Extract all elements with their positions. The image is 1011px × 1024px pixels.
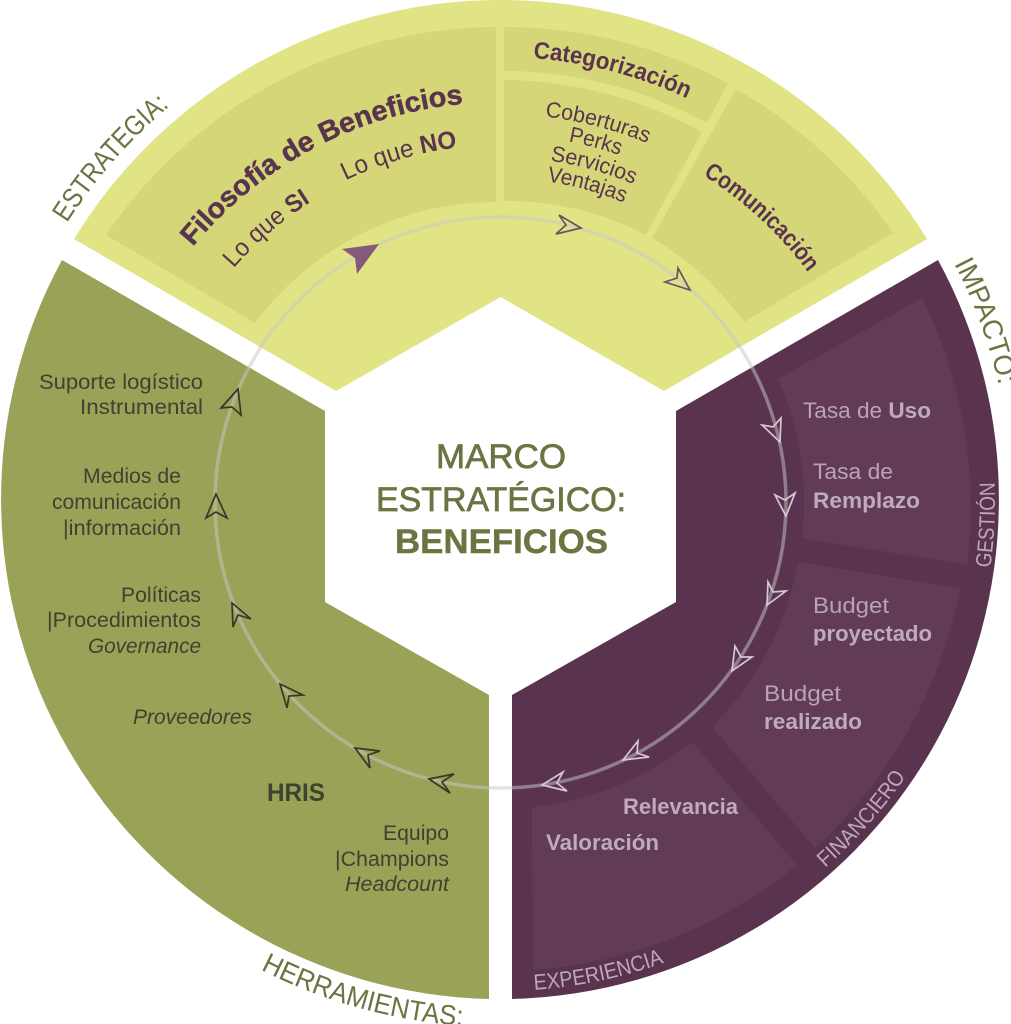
arrows on green panel bbox=[206, 389, 454, 793]
sub-panel: experiencia bbox=[532, 742, 797, 970]
text: budget proyectado bbox=[813, 593, 932, 646]
panel: estrategia bbox=[74, 0, 927, 391]
text: medios de comunicación: |información bbox=[63, 516, 181, 540]
text: políticas bbox=[47, 583, 201, 658]
text: lo que no: Lo que NO bbox=[340, 132, 456, 180]
text: filosofía de beneficios: Filosofía de Beneficios bbox=[179, 88, 462, 246]
text: tasa de remplazo: Tasa de bbox=[813, 459, 893, 484]
arrows on yellow panel bbox=[556, 215, 690, 290]
text: categorización: Categorización bbox=[534, 42, 690, 98]
text: políticas: |Procedimientos bbox=[47, 608, 201, 632]
arrows on purple panel bbox=[542, 418, 795, 791]
text: coberturas list: Ventajas bbox=[550, 166, 626, 202]
text: comunicación: Comunicación bbox=[706, 164, 816, 272]
text: valoración: Valoración bbox=[546, 830, 659, 855]
text: medios de comunicación: comunicación bbox=[52, 490, 181, 514]
title: BENEFICIOS bbox=[395, 523, 608, 561]
sub-panel: financiero bbox=[712, 562, 960, 848]
text: coberturas list bbox=[547, 102, 650, 202]
text: suporte logístico: Instrumental bbox=[80, 395, 203, 419]
text: budget realizado: Budget bbox=[764, 681, 842, 706]
text: tasa de uso: Tasa de Uso bbox=[803, 398, 931, 423]
text: relevancia: Relevancia bbox=[623, 794, 738, 819]
icon: filled start arrow bbox=[342, 244, 379, 274]
cycle ring bbox=[215, 217, 786, 788]
text: equipo: Headcount bbox=[345, 872, 450, 896]
sub-panel: coberturas bbox=[504, 80, 702, 235]
text: políticas: Governance bbox=[88, 634, 201, 658]
text: coberturas list: Coberturas bbox=[547, 102, 650, 142]
text: budget realizado: realizado bbox=[764, 709, 862, 734]
text: equipo bbox=[335, 821, 450, 896]
sub-panel: filosofía de beneficios bbox=[106, 27, 496, 323]
title bbox=[376, 438, 626, 561]
panel: impacto bbox=[512, 260, 999, 999]
text: políticas: Políticas bbox=[121, 583, 201, 607]
title: ESTRATÉGICO: bbox=[376, 481, 626, 519]
text: coberturas list: Perks bbox=[570, 126, 622, 154]
text: lo que si: Lo que SI bbox=[222, 188, 310, 267]
text: budget realizado bbox=[764, 681, 862, 734]
label: financiero: FINANCIERO bbox=[816, 771, 903, 867]
text: proveedores: Proveedores bbox=[133, 705, 252, 729]
text: medios de comunicación bbox=[52, 464, 181, 540]
label: gestión: GESTIÓN bbox=[976, 484, 996, 566]
text: equipo: |Champions bbox=[335, 847, 449, 871]
heading: estrategia: ESTRATEGIA: bbox=[52, 96, 168, 222]
text: suporte logístico: Suporte logístico bbox=[39, 370, 203, 394]
text: hris: HRIS bbox=[267, 779, 325, 807]
sub-panel: gestión bbox=[778, 298, 971, 565]
text: tasa de remplazo bbox=[813, 459, 920, 513]
text: equipo: Equipo bbox=[383, 821, 449, 845]
sub-panel: categorización bbox=[504, 27, 728, 123]
text: suporte logístico bbox=[39, 370, 203, 419]
text: medios de comunicación: Medios de bbox=[83, 464, 181, 488]
text: coberturas list: Servicios bbox=[552, 146, 636, 183]
text: tasa de remplazo: Remplazo bbox=[813, 488, 920, 513]
label: experiencia: EXPERIENCIA bbox=[534, 950, 664, 990]
text: budget proyectado: proyectado bbox=[813, 621, 932, 646]
text: budget proyectado: Budget bbox=[813, 593, 890, 618]
panel: herramientas bbox=[1, 260, 489, 999]
sub-panel: comunicación bbox=[652, 89, 893, 322]
title: MARCO bbox=[436, 438, 566, 476]
